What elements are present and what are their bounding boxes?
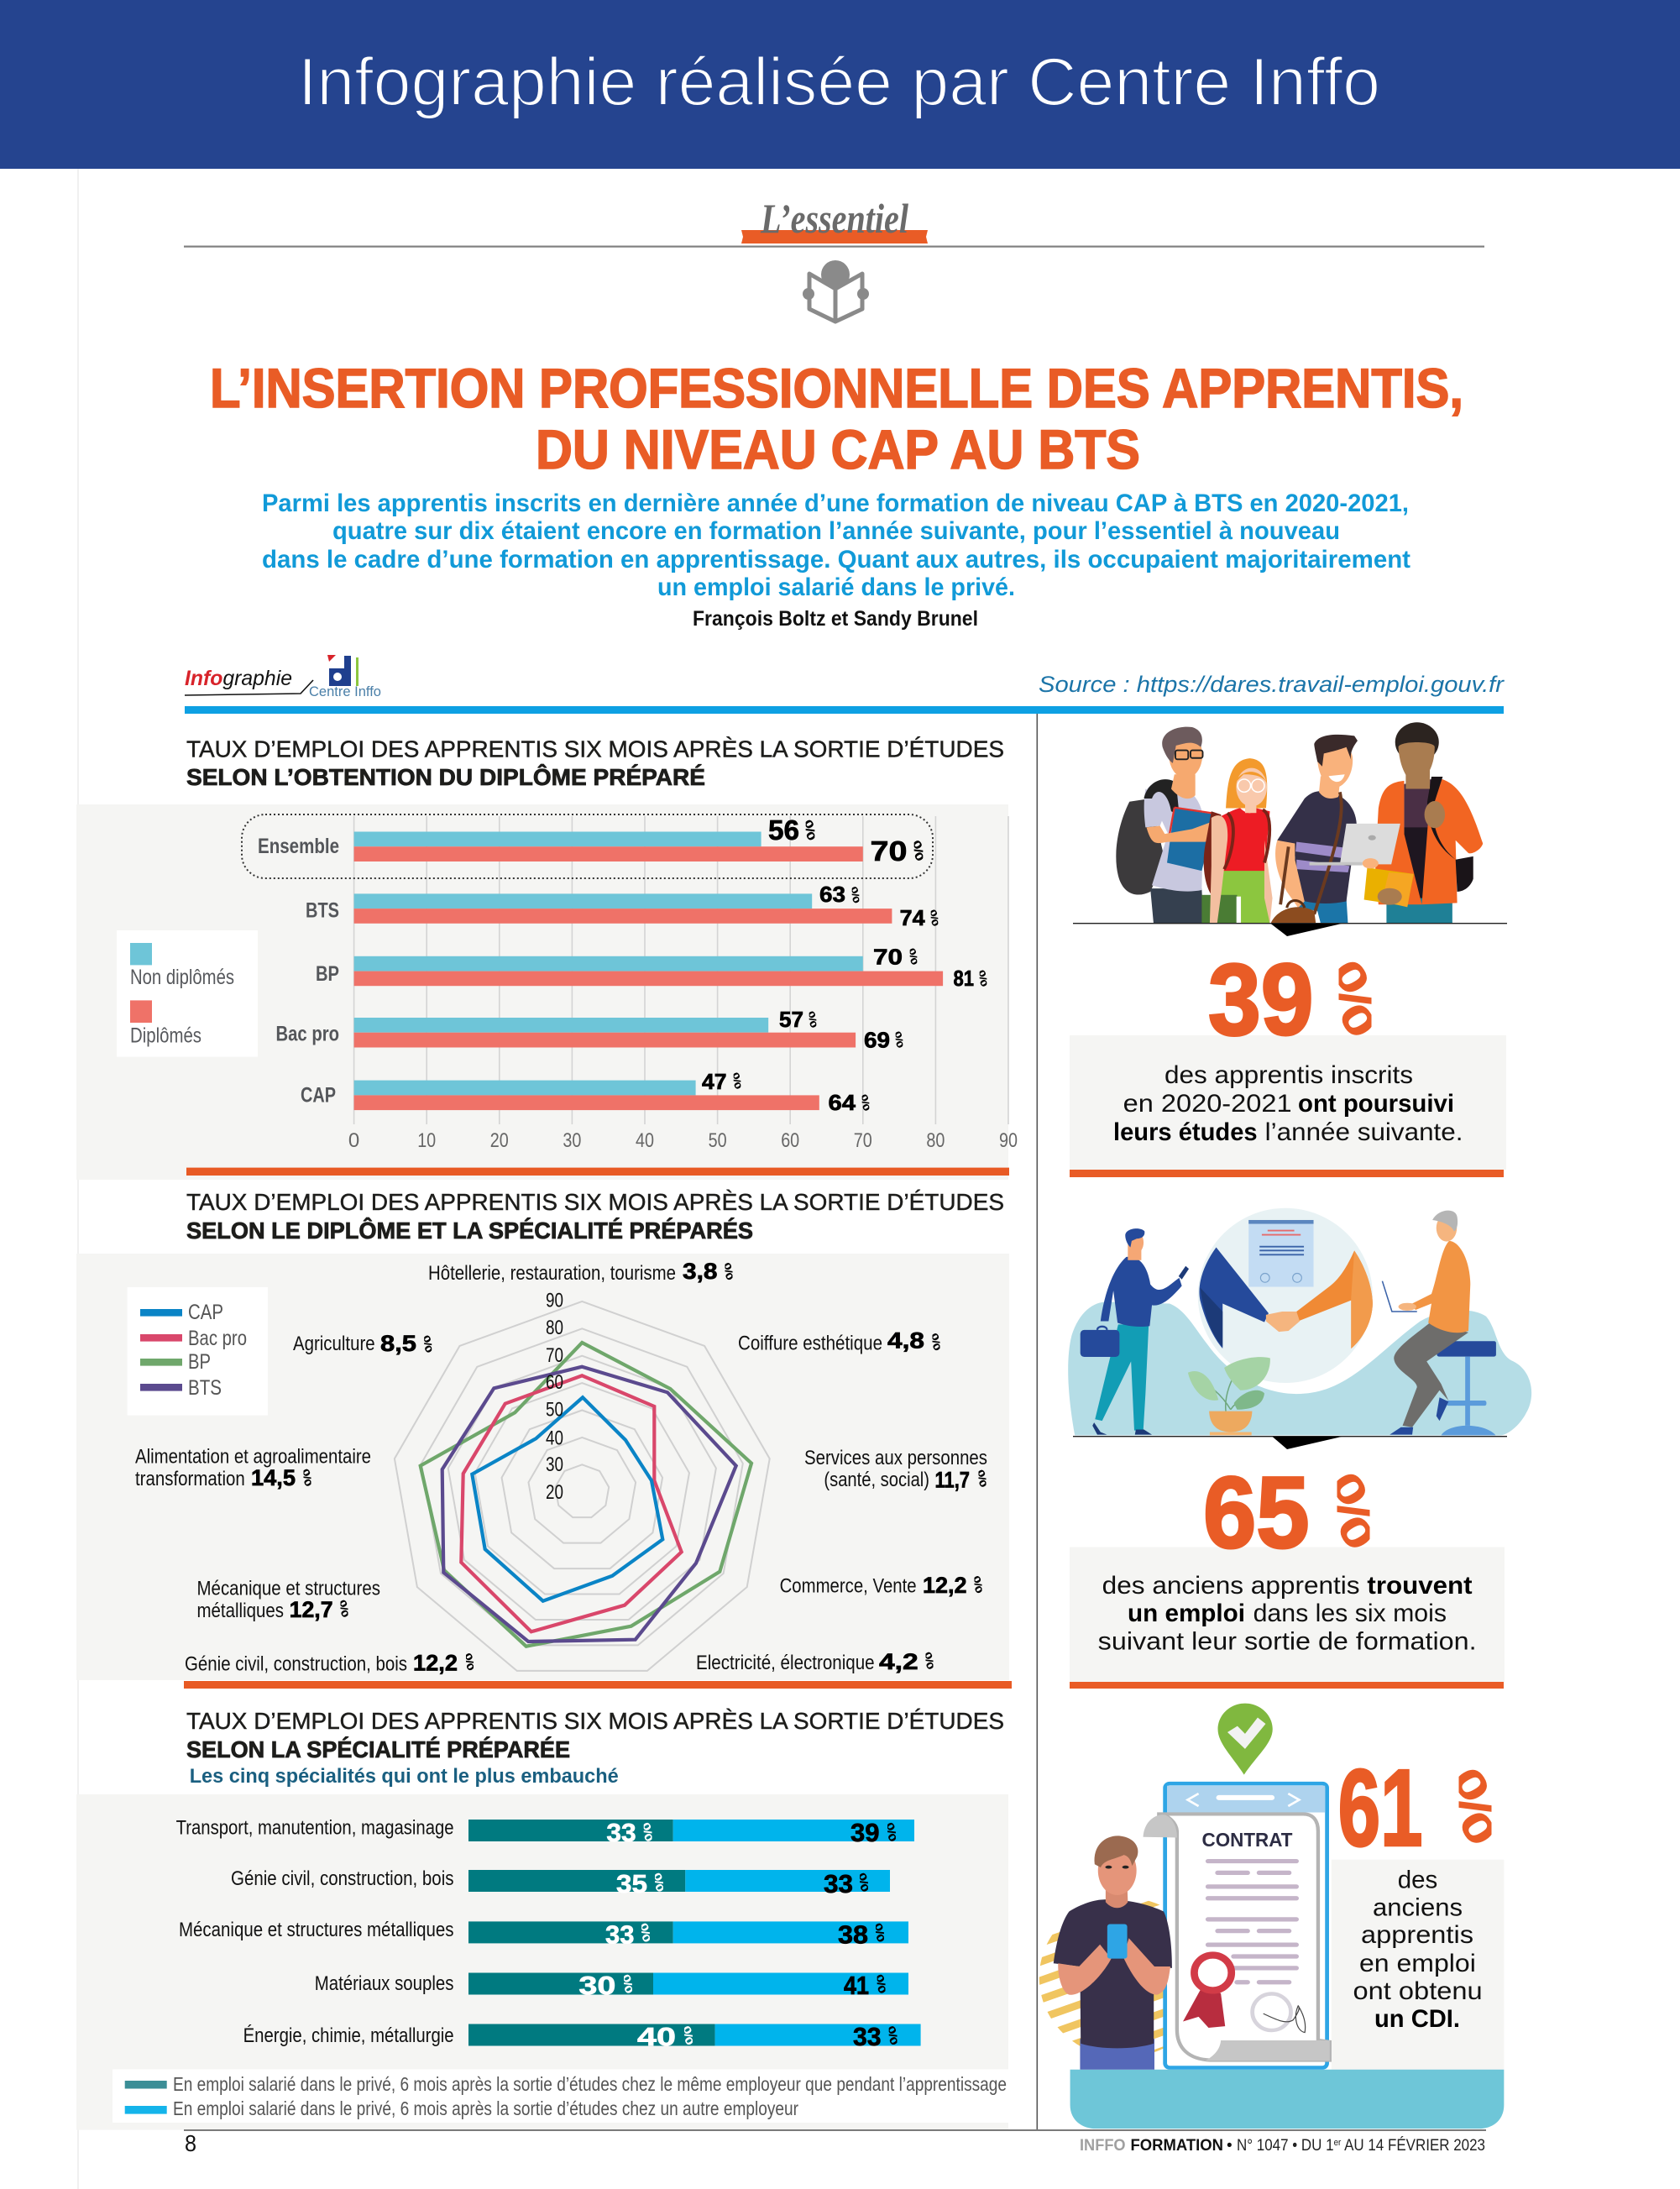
panel: employment by speciality (stacked bars) — [76, 1708, 1008, 2130]
radar labels: 4,2 — [879, 1649, 919, 1674]
stacked bars — [468, 1820, 921, 2045]
heading 3 — [186, 1708, 1004, 1788]
stacked bar values: % — [632, 1920, 658, 1945]
radar labels: % — [917, 1649, 941, 1673]
footer credits: er — [1334, 2138, 1342, 2148]
grid lines and axis: 80 — [926, 1129, 945, 1152]
radar labels: % — [924, 1331, 948, 1354]
radar chart: 80 — [546, 1317, 563, 1339]
legend: employer: En emploi salarié dans le privé, 6 mois après la sortie d’études chez le même employeur que pendant l’apprentissage — [173, 2073, 1007, 2095]
stacked bar values: % — [866, 1920, 892, 1945]
stacked bar values: 40 — [637, 2022, 676, 2051]
Infographie logo: Infographie — [185, 667, 292, 690]
panel: 65 % caption: trouvent — [1367, 1572, 1473, 1600]
heading 3: SELON LA SPÉCIALITÉ PRÉPARÉE — [186, 1736, 570, 1762]
stacked bar values: % — [880, 2023, 906, 2048]
value labels: 74 — [900, 905, 925, 930]
value labels: % — [795, 817, 824, 844]
striped circle behind man — [1039, 1899, 1164, 2052]
speciality labels: Génie civil, construction, bois — [231, 1867, 453, 1890]
grid lines and axis: 70 — [854, 1129, 872, 1152]
stat: 39 % — [1209, 962, 1372, 1037]
legend: levels — [128, 1287, 268, 1416]
panel: 39 % caption — [1070, 1035, 1506, 1177]
header banner: Infographie réalisée par Centre Inffo — [298, 45, 1380, 120]
radar labels: 12,2 — [923, 1573, 967, 1598]
person 4 in orange jacket — [1364, 722, 1483, 923]
radar labels: transformation — [135, 1468, 245, 1490]
value labels — [702, 814, 994, 1115]
stacked bar values: % — [878, 1820, 904, 1845]
stacked bar values: 39 — [850, 1818, 880, 1847]
radar chart — [395, 1290, 770, 1671]
radar labels: Services aux personnes — [804, 1447, 987, 1469]
stacked bar values: % — [635, 1820, 661, 1845]
grid lines and axis: 20 — [490, 1129, 509, 1152]
stacked bar values: 33 — [606, 1818, 636, 1847]
stat: 65 %: % — [1301, 1461, 1405, 1561]
radar labels — [135, 1259, 994, 1676]
category labels: BTS — [306, 898, 339, 922]
ground line and pointer 1 — [1073, 923, 1507, 936]
radar labels: Génie civil, construction, bois — [185, 1653, 407, 1676]
illustration: group of students — [1116, 722, 1483, 923]
source: Source : https://dares.travail-emploi.gouv.fr — [1039, 672, 1505, 697]
value labels: % — [801, 1008, 824, 1031]
grid lines and axis: 90 — [999, 1129, 1018, 1152]
laptop — [1310, 824, 1400, 868]
intro paragraph: un emploi salarié dans le privé. — [657, 573, 1015, 601]
value labels: 63 — [819, 882, 845, 907]
radar labels: % — [970, 1467, 994, 1490]
main title — [210, 357, 1463, 480]
stamp and signature — [1253, 1994, 1306, 2033]
panel: 39 % caption: ont poursuivi — [1298, 1090, 1454, 1118]
radar labels: (santé, social) — [824, 1469, 929, 1491]
heading 3: TAUX D’EMPLOI DES APPRENTIS SIX MOIS APRÈS LA SORTIE D’ÉTUDES — [186, 1708, 1004, 1734]
stacked bar values: 38 — [838, 1919, 868, 1950]
bars — [354, 831, 943, 1110]
category labels: Ensemble — [258, 835, 339, 858]
heading 3: Les cinq spécialités qui ont le plus embauché — [190, 1765, 619, 1788]
legend: diploma: Diplômés — [130, 1024, 201, 1048]
panel: employment rate by diploma — [76, 736, 1018, 1180]
panel: 65 % caption: un emploi — [1128, 1600, 1245, 1627]
stacked bar values: % — [646, 1870, 672, 1895]
intro paragraph: Parmi les apprentis inscrits en dernière année d’une formation de niveau CAP à BTS en 2020-2021, — [262, 490, 1409, 517]
person 2 with red top — [1201, 758, 1273, 923]
radar labels: Electricité, électronique — [696, 1652, 875, 1674]
heading 2: SELON LE DIPLÔME ET LA SPÉCIALITÉ PRÉPARÉS — [186, 1217, 753, 1244]
value labels: 70 — [870, 835, 907, 867]
panel: 39 % caption: des apprentis inscrits — [1164, 1061, 1413, 1089]
grid lines and axis: 60 — [781, 1129, 799, 1152]
radar labels: Coiffure esthétique — [738, 1332, 882, 1354]
stat: 65 % — [1206, 1474, 1370, 1550]
main title: L’INSERTION PROFESSIONNELLE DES APPRENTIS, — [210, 357, 1463, 419]
legend: levels: BP — [188, 1350, 211, 1374]
intro paragraph: dans le cadre d’une formation en apprentissage. Quant aux autres, ils occupaient majoritairement — [262, 546, 1410, 573]
highlight: Ensemble row — [242, 814, 933, 878]
value labels: 56 — [768, 814, 799, 846]
grid lines and axis: 10 — [417, 1129, 436, 1152]
panel: 61 % caption background — [1332, 1860, 1504, 2070]
stacked bar values: 33 — [853, 2022, 882, 2051]
stat: 61 %: 61 — [1338, 1746, 1422, 1869]
radar labels: % — [458, 1651, 481, 1673]
radar labels: % — [295, 1466, 319, 1490]
radar labels: 12,7 — [290, 1597, 333, 1622]
footer credits: INFFO — [1080, 2137, 1126, 2155]
stat: 39 %: % — [1302, 949, 1406, 1049]
value labels: 69 — [864, 1028, 890, 1053]
stacked bar values: % — [868, 1972, 894, 1997]
panel: employment by diploma and speciality (radar) — [76, 1189, 1012, 1689]
grid lines and axis: 50 — [709, 1129, 727, 1152]
heading 2: TAUX D’EMPLOI DES APPRENTIS SIX MOIS APRÈS LA SORTIE D’ÉTUDES — [186, 1189, 1004, 1215]
stacked bar values: % — [615, 1972, 641, 1997]
Infographie logo — [185, 667, 313, 695]
legend: levels: BTS — [188, 1376, 222, 1400]
speciality labels — [176, 1817, 454, 2047]
radar labels: Hôtellerie, restauration, tourisme — [428, 1262, 676, 1285]
person 1 with backpack — [1116, 727, 1217, 923]
radar labels: 12,2 — [413, 1651, 458, 1676]
panel: 39 % caption: en 2020-2021 — [1123, 1090, 1292, 1118]
grid lines and axis: 40 — [636, 1129, 654, 1152]
heading 1: SELON L’OBTENTION DU DIPLÔME PRÉPARÉ — [186, 763, 705, 790]
legend: levels: CAP — [188, 1301, 223, 1324]
radar chart: 60 — [546, 1371, 563, 1394]
radar chart: 40 — [546, 1427, 563, 1450]
text: 61 % caption: apprentis — [1361, 1921, 1473, 1949]
illustration: handshake and contract — [1068, 1208, 1531, 1435]
radar labels: Alimentation et agroalimentaire — [135, 1445, 371, 1468]
person 3 striped shirt — [1271, 735, 1358, 923]
man with phone — [1054, 1836, 1172, 2070]
radar labels: 3,8 — [683, 1259, 717, 1284]
radar labels: Commerce, Vente — [780, 1575, 917, 1598]
contract document — [1248, 1220, 1314, 1287]
text: 61 % caption: un CDI. — [1374, 2005, 1460, 2033]
stacked bar values — [578, 1818, 906, 2051]
value labels: 81 — [954, 966, 974, 991]
text: 61 % caption: anciens — [1373, 1893, 1463, 1921]
icon: reader with open book — [803, 260, 869, 322]
radar labels: % — [332, 1597, 356, 1621]
contract paper: CONTRAT — [1202, 1830, 1293, 1851]
page number: 8 — [185, 2130, 196, 2156]
radar chart: 90 — [546, 1290, 563, 1312]
contract paper — [1144, 1814, 1330, 2061]
radar labels: 4,8 — [887, 1328, 924, 1354]
stacked bar values: 33 — [824, 1869, 853, 1898]
person right on stool — [1382, 1211, 1496, 1435]
grid lines and axis — [348, 816, 1018, 1152]
value labels: % — [854, 1092, 877, 1114]
illustration: contract with young man — [991, 1704, 1504, 2130]
heading 1: TAUX D’EMPLOI DES APPRENTIS SIX MOIS APRÈS LA SORTIE D’ÉTUDES — [186, 736, 1004, 762]
value labels: % — [971, 967, 994, 990]
stacked bar values: 41 — [844, 1971, 869, 2000]
value labels: 64 — [828, 1090, 856, 1115]
panel: 65 % caption: suivant leur sortie de formation. — [1098, 1628, 1477, 1656]
panel: 65 % caption: dans les six mois — [1253, 1600, 1447, 1627]
radar chart: 20 — [546, 1481, 563, 1504]
stat: 65 %: 65 — [1203, 1455, 1310, 1569]
section tag: L'essentiel — [184, 195, 1484, 248]
intro paragraph — [262, 490, 1410, 601]
stacked bar values: 30 — [578, 1971, 615, 2000]
legend: diploma — [117, 930, 258, 1057]
speciality labels: Mécanique et structures métalliques — [179, 1919, 453, 1941]
grid lines and axis: 30 — [563, 1129, 581, 1152]
contract frame — [1165, 1783, 1327, 2068]
value labels: 47 — [702, 1069, 727, 1094]
radar chart: 70 — [546, 1344, 563, 1367]
blue rule — [185, 706, 1504, 714]
category labels: Bac pro — [275, 1023, 339, 1046]
Centre Inffo logo — [309, 655, 381, 699]
stacked bar values: 35 — [616, 1869, 647, 1898]
value labels: % — [887, 1029, 910, 1051]
legend: diploma: Non diplômés — [130, 966, 234, 989]
stacked bar values: 33 — [605, 1919, 634, 1950]
text: 61 % caption: en emploi — [1359, 1950, 1476, 1977]
radar labels: métalliques — [196, 1600, 284, 1622]
value labels: % — [923, 907, 945, 930]
legend: levels: Bac pro — [188, 1327, 247, 1350]
radar chart: 50 — [546, 1399, 563, 1422]
value labels: 70 — [873, 945, 903, 970]
radar labels: Mécanique et structures — [196, 1577, 380, 1600]
text: 61 % caption: ont obtenu — [1353, 1977, 1483, 2005]
section tag: L'essentiel: L’essentiel — [760, 195, 908, 242]
main title: DU NIVEAU CAP AU BTS — [536, 418, 1140, 480]
radar labels: 11,7 — [935, 1468, 970, 1493]
person left with briefcase — [1081, 1228, 1189, 1435]
intro paragraph: quatre sur dix étaient encore en formation l’année suivante, pour l’essentiel à nouveau — [332, 517, 1340, 545]
radar labels: Agriculture — [293, 1333, 375, 1355]
panel: 65 % caption: des anciens apprentis — [1102, 1572, 1360, 1600]
stat: 61 % — [1340, 1768, 1491, 1848]
text: 61 % caption — [1353, 1866, 1483, 2033]
speciality labels: Transport, manutention, magasinage — [176, 1817, 454, 1840]
radar labels: 8,5 — [380, 1331, 416, 1356]
heading 2 — [186, 1189, 1004, 1244]
value labels: 57 — [779, 1007, 803, 1032]
category labels — [258, 835, 339, 1108]
speciality labels: Matériaux souples — [315, 1972, 453, 1995]
value labels: % — [844, 884, 866, 907]
ribbon seal — [1183, 1956, 1232, 2028]
value labels: % — [725, 1070, 748, 1092]
handshake — [1199, 1247, 1373, 1348]
authors: François Boltz et Sandy Brunel — [693, 607, 978, 631]
radar labels: % — [966, 1574, 990, 1596]
legend: employer: En emploi salarié dans le privé, 6 mois après la sortie d’études chez un autre employeur — [173, 2097, 798, 2119]
heading 1 — [186, 736, 1004, 790]
ground line and pointer 2 — [1073, 1436, 1507, 1449]
category labels: CAP — [301, 1084, 336, 1108]
panel: 39 % caption: leurs études — [1113, 1118, 1258, 1146]
radar labels: 14,5 — [251, 1465, 296, 1490]
value labels: % — [902, 945, 924, 968]
grid lines and axis: 0 — [348, 1129, 359, 1152]
text: 61 % caption: des — [1398, 1866, 1437, 1893]
radar labels: % — [416, 1333, 439, 1356]
footer credits — [1080, 2137, 1485, 2155]
speciality labels: Énergie, chimie, métallurgie — [243, 2024, 454, 2047]
radar labels: % — [716, 1260, 741, 1283]
stat: 39 %: 39 — [1208, 942, 1313, 1056]
stacked bar values: % — [850, 1870, 877, 1895]
radar chart: 30 — [546, 1453, 563, 1476]
stacked bar values: % — [675, 2023, 701, 2048]
stat: 61 %: % — [1422, 1757, 1526, 1856]
panel: 39 % caption: l’année suivante. — [1265, 1118, 1463, 1146]
potted plant — [1188, 1357, 1270, 1435]
Centre Inffo logo: Centre Inffo — [309, 683, 381, 699]
footer credits: AU 14 FÉVRIER 2023 — [1341, 2137, 1485, 2155]
footer credits: • — [1227, 2137, 1233, 2155]
footer credits: N° 1047 • DU 1 — [1237, 2137, 1345, 2155]
legend: employer — [113, 2069, 1008, 2123]
value labels: % — [903, 837, 932, 865]
category labels: BP — [316, 962, 339, 986]
header banner — [0, 0, 1680, 169]
footer credits: FORMATION — [1130, 2137, 1223, 2155]
footer line — [184, 2129, 1486, 2131]
panel: 65 % caption — [1070, 1547, 1505, 1689]
icon: green check pin — [1218, 1704, 1273, 1775]
